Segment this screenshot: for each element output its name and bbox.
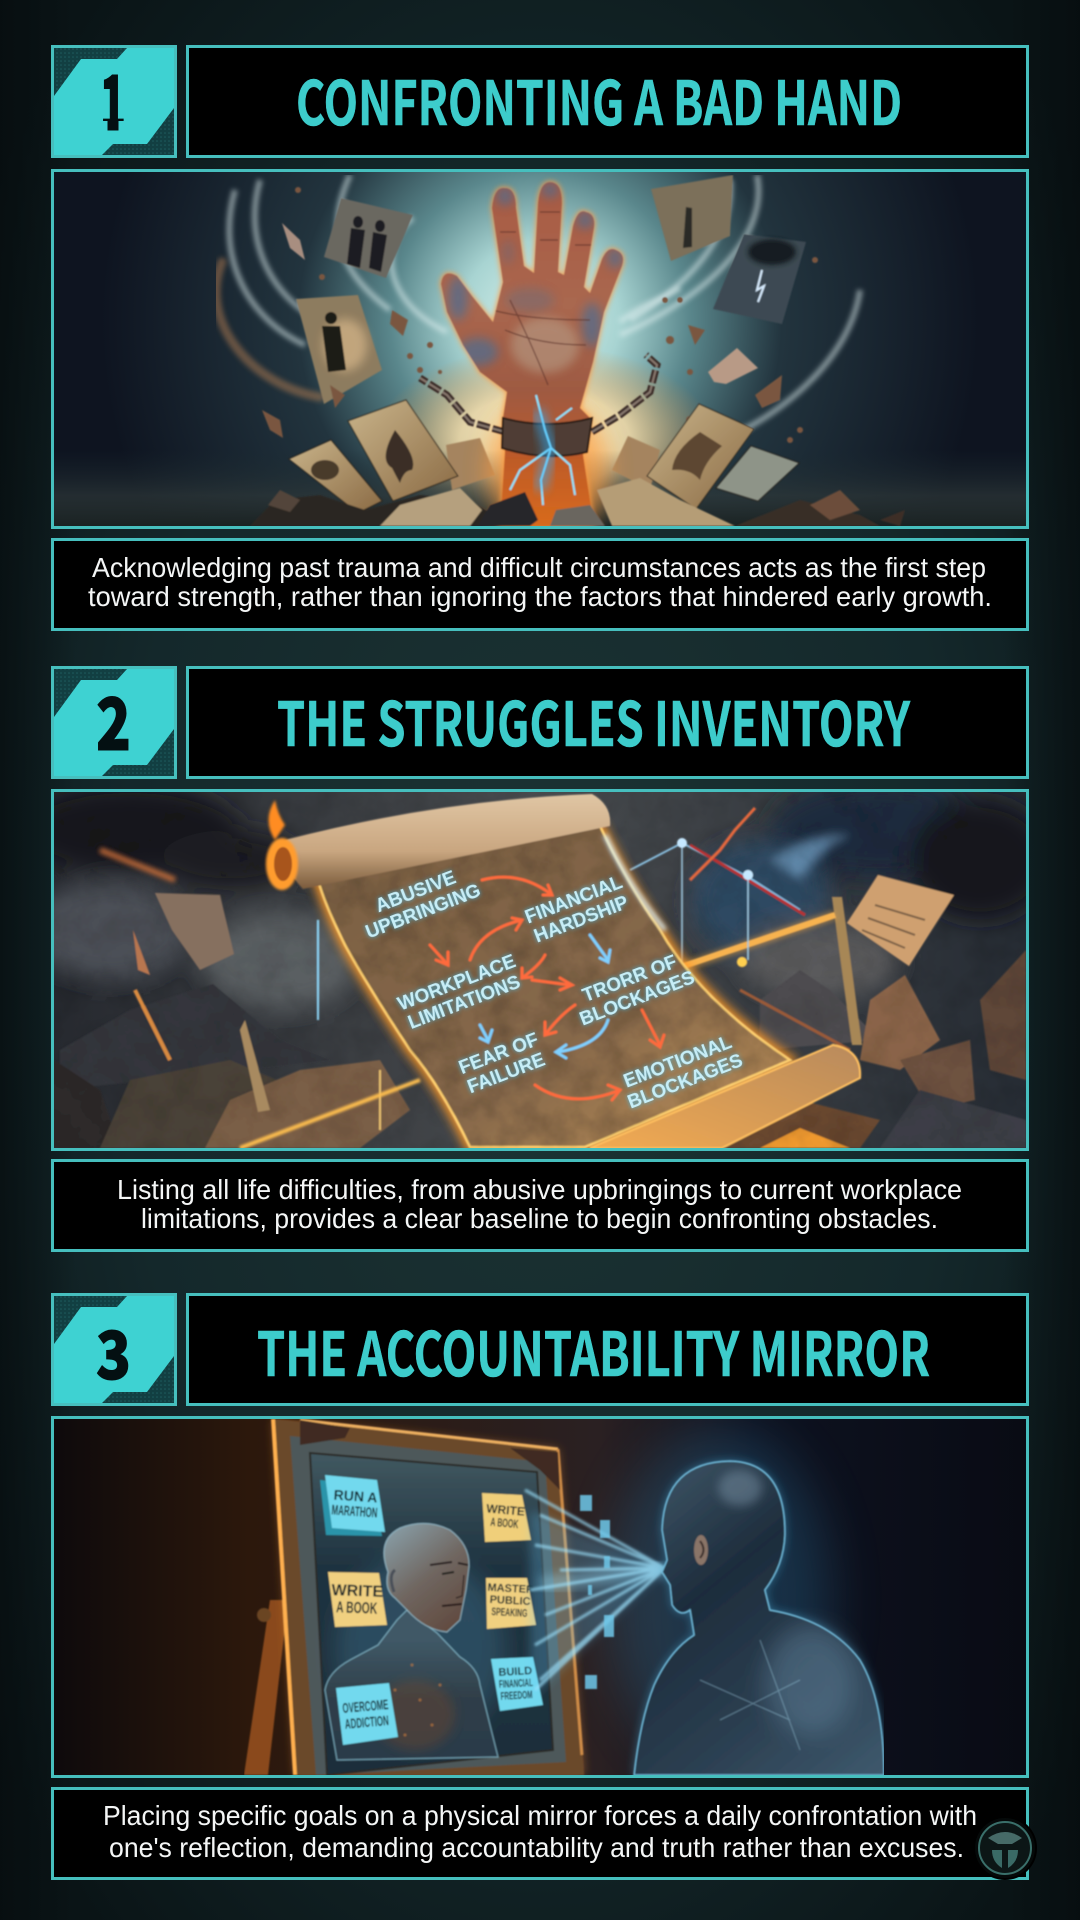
mountains and rocks — [54, 950, 1026, 1148]
ruler and charts — [100, 808, 862, 1130]
sticky notes: PUBLIC — [489, 1594, 531, 1608]
section 3 number badge — [52, 1294, 176, 1404]
blue lit cloud streak — [770, 834, 850, 880]
easel — [244, 1600, 288, 1775]
blocks and cards — [289, 400, 799, 513]
floating photos — [282, 175, 806, 404]
scroll labels: HARDSHIP — [531, 892, 632, 947]
sticky notes: WRITE — [331, 1582, 384, 1601]
scroll labels — [355, 861, 746, 1113]
sticky notes: MASTER — [487, 1582, 534, 1596]
number 2: 2 — [96, 666, 131, 771]
sticky notes: WRITE — [486, 1501, 525, 1519]
scroll labels: WORKPLACE — [395, 951, 519, 1015]
flow arrows — [430, 877, 664, 1100]
scroll labels: UPBRINGING — [363, 880, 484, 943]
sticky notes — [320, 1475, 543, 1745]
scroll — [240, 794, 860, 1150]
data beams — [525, 1490, 665, 1700]
loose papers — [133, 875, 954, 975]
panel: hand breaking free illustration — [52, 170, 1028, 540]
section 3 caption: one's reflection, demanding accountability and truth rather than excuses. — [109, 1832, 964, 1863]
scroll labels: FAILURE — [465, 1050, 548, 1098]
lightning — [510, 395, 575, 505]
section 1 caption: Acknowledging past trauma and difficult circumstances acts as the first step — [92, 552, 986, 583]
sticky notes: FINANCIAL — [499, 1677, 533, 1691]
logo badge — [974, 1817, 1036, 1879]
mirror — [273, 1419, 584, 1775]
sticky notes: FREEDOM — [500, 1689, 533, 1703]
broken chains — [420, 355, 657, 456]
section 3 caption: Placing specific goals on a physical mirror forces a daily confrontation with — [103, 1800, 977, 1831]
section 2 heading — [188, 668, 1028, 778]
scroll labels: FEAR OF — [456, 1030, 542, 1079]
orange smoke arc — [216, 262, 320, 397]
scroll labels: LIMITATIONS — [405, 972, 524, 1034]
sticky notes: OVERCOME — [342, 1696, 389, 1716]
reflection — [325, 1523, 505, 1760]
sticky notes: ADDICTION — [344, 1712, 389, 1732]
section 2 number badge — [52, 666, 176, 778]
section 1 caption — [52, 540, 1028, 630]
sticky notes: A BOOK — [336, 1599, 378, 1618]
sticky notes: SPEAKING — [491, 1606, 528, 1620]
rubble — [250, 478, 905, 526]
number 3: 3 — [96, 1303, 131, 1399]
sticky notes: MARATHON — [331, 1501, 378, 1521]
hand — [441, 182, 623, 540]
number 1: 1 — [100, 42, 126, 152]
debris — [262, 187, 818, 443]
scroll labels: EMOTIONAL — [621, 1032, 735, 1092]
section 1 number badge — [52, 42, 176, 156]
swirling smoke — [229, 175, 860, 450]
section 2 caption: limitations, provides a clear baseline to begin confronting obstacles. — [141, 1203, 938, 1234]
scroll labels: TRORR OF — [580, 952, 680, 1007]
storm clouds — [20, 780, 1050, 1010]
sticky notes: BUILD — [498, 1665, 532, 1679]
scroll labels: FINANCIAL — [522, 872, 626, 928]
rock texture — [54, 792, 1026, 1148]
panel: accountability mirror illustration — [52, 1418, 1028, 1776]
section 2 caption — [52, 1160, 1028, 1250]
sticky notes: RUN A — [333, 1487, 378, 1506]
scroll labels: BLOCKAGES — [577, 967, 698, 1030]
scroll labels: BLOCKAGES — [625, 1050, 746, 1113]
section 1 caption: toward strength, rather than ignoring the factors that hindered early growth. — [88, 581, 992, 612]
section 2 caption: Listing all life difficulties, from abusive upbringings to current workplace — [117, 1174, 962, 1205]
sticky notes: A BOOK — [490, 1515, 519, 1531]
scroll labels: ABUSIVE — [373, 867, 459, 917]
panel: burning scroll illustration — [20, 780, 1050, 1150]
man facing mirror — [634, 1461, 884, 1775]
section 3 caption — [52, 1788, 1028, 1878]
section 1 heading — [188, 46, 1028, 156]
